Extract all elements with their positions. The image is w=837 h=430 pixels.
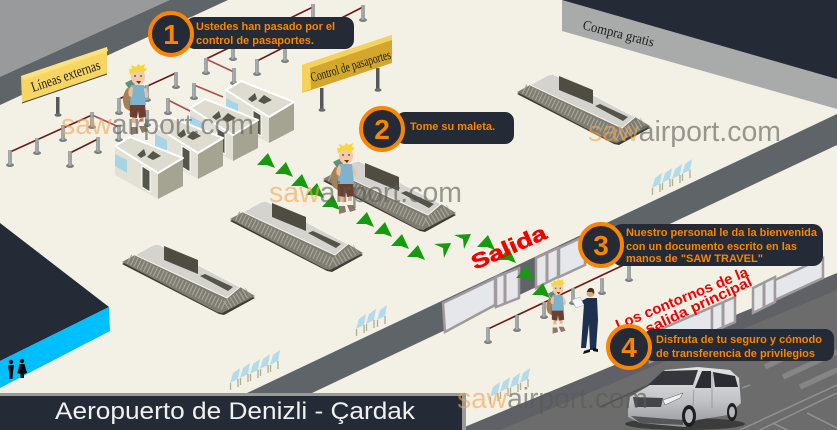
step 2 badge: [361, 108, 403, 150]
traveller at exit: [546, 279, 566, 334]
step 1 badge: [150, 13, 192, 55]
step 4 badge: 4: [621, 332, 637, 363]
glass exit doors and windows: [443, 236, 823, 362]
watermarks: sawairport.com: [588, 116, 781, 148]
watermarks: [61, 109, 781, 415]
red label: exit: Salida: [468, 221, 551, 275]
title: Aeropuerto de Denizli - Çardak: [55, 398, 416, 425]
stanchions and ropes: [6, 4, 367, 168]
road and lower strip: [460, 273, 837, 430]
step 2 text: Tome su maleta.: [410, 121, 495, 133]
block: restrooms: [0, 223, 110, 388]
step 2 badge: 2: [374, 114, 390, 145]
step 4 badge: [608, 326, 650, 368]
step 1 text: Ustedes han pasado por el: [196, 21, 335, 33]
sign: passport control: [302, 35, 392, 112]
step 3 text: [626, 227, 818, 265]
step 1 badge: 1: [163, 19, 179, 50]
step 4 callout: [608, 326, 834, 368]
step 3 badge: 3: [593, 230, 609, 261]
red label: exit surroundings: salida principal: [643, 274, 755, 338]
title bar: [0, 393, 466, 430]
passport booths: [115, 81, 294, 199]
icon: restroom figures: [8, 359, 27, 379]
step 3 text: manos de "SAW TRAVEL": [626, 253, 763, 265]
step 2 callout: [361, 108, 514, 150]
step 3 text: Nuestro personal le da la bienvenida: [626, 227, 818, 239]
green route arrows: [257, 153, 550, 298]
watermarks: sawairport.com: [457, 383, 648, 415]
van: [625, 367, 745, 430]
staff member with document: [572, 288, 598, 354]
label: passport control: Control de pasaportes: [309, 47, 392, 85]
watermarks: sawairport.com: [269, 177, 462, 209]
wall: top left building: [0, 0, 228, 105]
step 4 text: de transferencia de privilegios: [656, 348, 815, 360]
traveller at passport control: [123, 64, 148, 135]
step 4 text: Disfruta de tu seguro y cómodo: [656, 334, 822, 346]
step 4 text: [656, 334, 822, 360]
shop: compra gratis: [562, 0, 837, 109]
step 3 callout: [580, 224, 823, 266]
wall: terminal dark band: [247, 114, 837, 393]
label: external lines: Líneas externas: [29, 57, 103, 96]
sign: external lines: [21, 47, 108, 117]
baggage carousels: [122, 74, 650, 315]
watermarks: sawairport.com: [61, 109, 254, 141]
step 1 callout: [150, 13, 354, 55]
waiting chairs: [230, 159, 692, 404]
step 3 badge: [580, 224, 622, 266]
step 3 text: con un documento escrito en las: [626, 241, 797, 253]
label: compra gratis: Compra gratis: [581, 18, 655, 51]
traveller at baggage claim: [331, 143, 356, 214]
step 1 text: [196, 21, 335, 47]
step 1 text: control de pasaportes.: [196, 35, 314, 47]
red label: exit surroundings: Los contornos de la: [613, 264, 752, 334]
exit stanchions: [484, 262, 633, 344]
